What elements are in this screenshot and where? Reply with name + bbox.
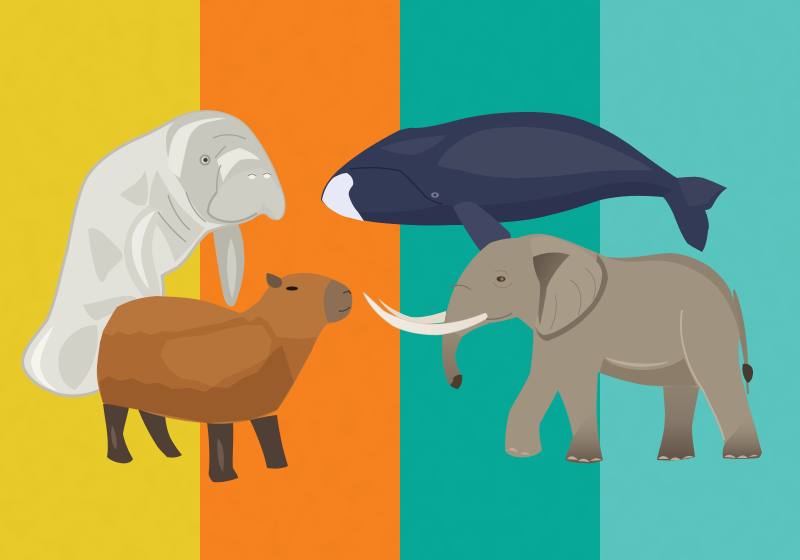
manatee near flipper (124, 205, 165, 300)
elephant ear rim shadow (535, 254, 608, 341)
manatee far flipper (213, 224, 244, 307)
elephant belly shadow (600, 358, 697, 386)
whale jaw line (350, 168, 443, 204)
whale back highlight (437, 127, 653, 178)
capybara eye (286, 286, 298, 290)
manatee face wrinkles (158, 135, 246, 242)
elephant eye (493, 271, 512, 288)
capybara belly fur, jagged (99, 345, 294, 423)
elephant inner ear (533, 253, 570, 325)
elephant toenails (508, 448, 758, 462)
whale white chin patch (322, 173, 364, 221)
manatee nostrils (248, 172, 271, 179)
elephant mouth (486, 313, 512, 319)
whale tail fluke shade (677, 177, 727, 206)
elephant rear leg contour (681, 310, 724, 440)
elephant far hind leg (657, 383, 700, 460)
manatee eye (200, 154, 210, 166)
manatee grey body markings (58, 170, 205, 390)
whale flipper (453, 202, 511, 254)
elephant body (442, 234, 762, 463)
elephant ear (530, 236, 602, 335)
elephant near tusk (363, 292, 487, 335)
manatee head light patch (168, 118, 227, 178)
capybara body (97, 273, 352, 424)
animal: right whale (321, 112, 727, 254)
capybara ear (267, 273, 282, 288)
capybara leg highlights (111, 425, 224, 472)
animal: capybara (97, 273, 352, 482)
manatee muzzle (208, 168, 284, 222)
animal: elephant (363, 234, 762, 463)
animal: manatee (23, 112, 284, 396)
capybara nose (339, 291, 351, 311)
whale body (321, 112, 727, 252)
elephant brow (450, 285, 471, 290)
whale shoulder highlight (380, 135, 447, 155)
elephant tail (734, 290, 748, 394)
whale belly band (345, 182, 672, 225)
capybara back legs (103, 403, 133, 463)
elephant trunk shading (442, 310, 462, 388)
elephant ear folds (550, 268, 595, 330)
elephant front foot shade (565, 405, 603, 463)
manatee head (166, 112, 284, 225)
manatee tail highlight (31, 325, 58, 391)
elephant trunk tip (450, 375, 462, 389)
elephant far front leg (505, 390, 558, 457)
capybara middle lighter fur patch (160, 325, 272, 387)
capybara front legs (250, 415, 288, 469)
elephant belly highlight (606, 358, 668, 366)
capybara mid fur, jagged (97, 316, 317, 423)
manatee body (23, 112, 284, 396)
capybara muzzle (324, 280, 352, 322)
manatee snout light stripe (217, 148, 260, 182)
elephant back rim shade (607, 253, 740, 335)
whale eye (431, 192, 439, 198)
elephant far tusk (378, 298, 446, 324)
manatee muzzle lower rim (208, 192, 257, 222)
elephant tail tuft (742, 364, 753, 383)
elephant rear foot shade (723, 413, 762, 459)
